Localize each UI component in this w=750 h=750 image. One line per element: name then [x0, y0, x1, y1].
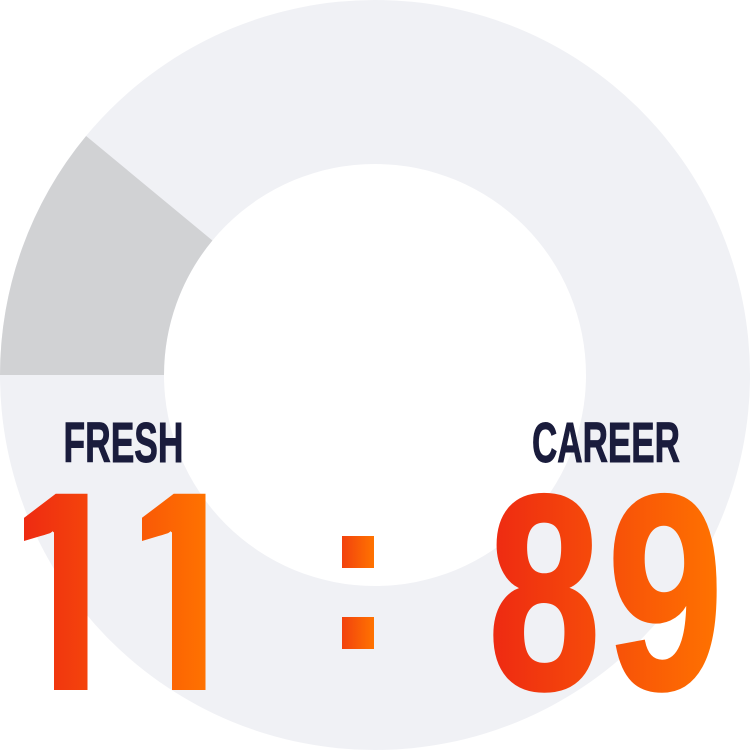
colon separator [342, 536, 374, 649]
number: 89 [488, 436, 723, 748]
label: fresh: FRESH [64, 411, 184, 475]
number: 89: 8 [488, 436, 600, 748]
number: 11: 1 [116, 434, 251, 750]
donut segment: fresh 11% [0, 136, 212, 375]
number: 11: 1 [0, 434, 133, 750]
number: 11 [24, 494, 206, 690]
